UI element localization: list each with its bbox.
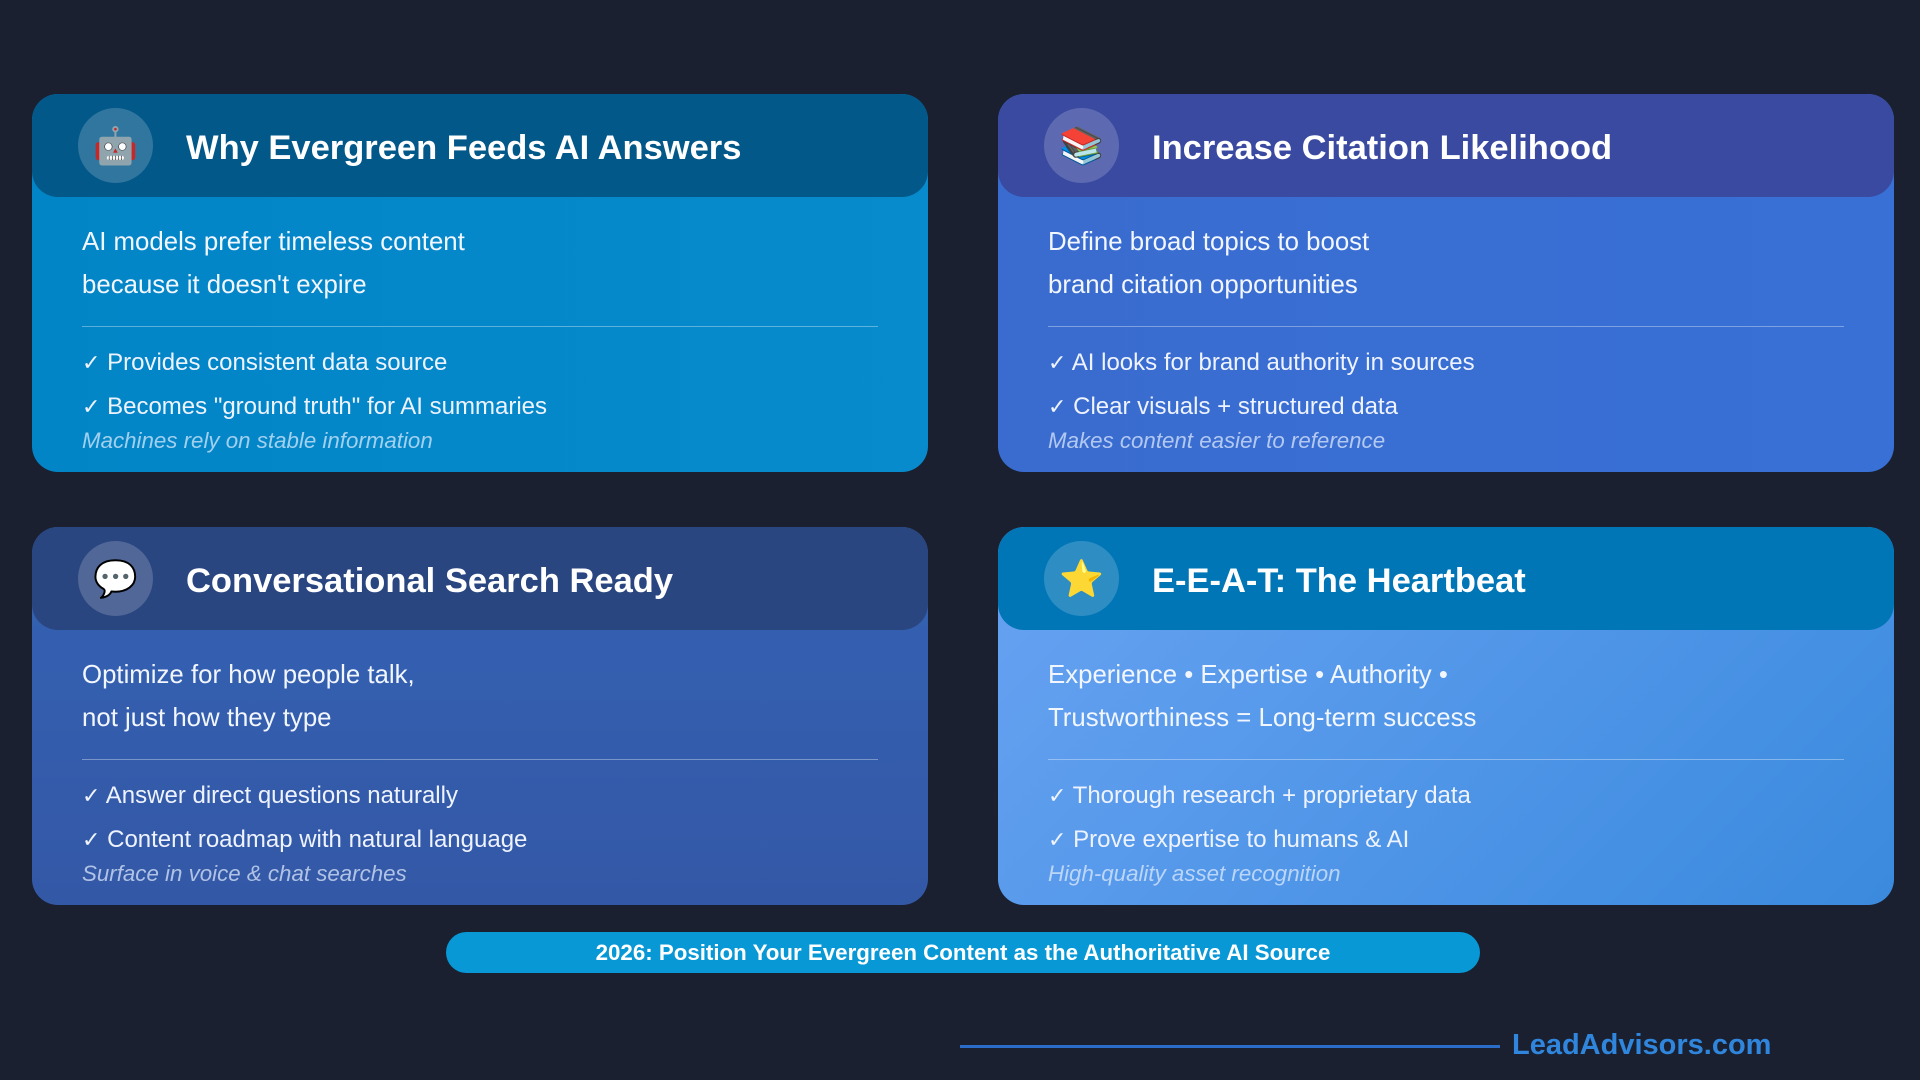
note: conversational: Surface in voice & chat searches — [82, 861, 407, 886]
text: eeat body: Experience • Expertise • Authority • — [1048, 661, 1448, 689]
header: eeat: ⭐ — [1059, 558, 1104, 598]
list: conversational checks — [82, 782, 527, 853]
header: conversational: 💬 — [93, 558, 138, 598]
note: eeat: High-quality asset recognition — [1048, 861, 1340, 886]
text: citation body: Define broad topics to boost — [1048, 228, 1369, 256]
header: conversational — [32, 527, 928, 630]
panel: conversational — [32, 527, 928, 905]
header: citation: Increase Citation Likelihood — [1152, 129, 1612, 167]
list: why evergreen checks: ✓ Becomes "ground truth" for AI summaries — [82, 393, 547, 420]
list: conversational checks: ✓ Content roadmap with natural language — [82, 826, 527, 853]
logo line — [960, 1045, 1500, 1048]
header: eeat — [998, 527, 1894, 630]
text: why evergreen body: AI models prefer timeless content — [82, 228, 465, 256]
text: eeat body — [1048, 661, 1476, 732]
list: citation checks: ✓ AI looks for brand authority in sources — [1048, 349, 1475, 376]
list: eeat checks: ✓ Prove expertise to humans & AI — [1048, 826, 1409, 853]
list: eeat checks — [1048, 782, 1471, 853]
text: citation body: brand citation opportunities — [1048, 271, 1358, 299]
logo: LeadAdvisors.com: LeadAdvisors.com — [1512, 1029, 1771, 1061]
header: conversational: Conversational Search Ready — [186, 562, 673, 600]
text: why evergreen body: because it doesn't expire — [82, 271, 367, 299]
header: citation — [998, 94, 1894, 197]
list: conversational checks: ✓ Answer direct questions naturally — [82, 782, 458, 809]
header: why evergreen: 🤖 — [93, 124, 138, 166]
text: citation body — [1048, 228, 1369, 299]
header: why evergreen — [32, 94, 928, 197]
text: conversational body — [82, 661, 415, 732]
header: why evergreen: Why Evergreen Feeds AI Answers — [186, 129, 741, 167]
text: conversational body: Optimize for how people talk, — [82, 661, 415, 689]
list: citation checks — [1048, 349, 1475, 420]
list: citation checks: ✓ Clear visuals + structured data — [1048, 393, 1398, 420]
panel: eeat — [998, 527, 1894, 905]
text: eeat body: Trustworthiness = Long-term success — [1048, 704, 1476, 732]
note: why evergreen: Machines rely on stable information — [82, 428, 433, 453]
banner: 2026 callout: 2026: Position Your Evergreen Content as the Authoritative AI Source — [596, 940, 1330, 965]
note: citation: Makes content easier to reference — [1048, 428, 1385, 453]
header: eeat: E-E-A-T: The Heartbeat — [1152, 562, 1526, 600]
text: why evergreen body — [82, 228, 465, 299]
list: why evergreen checks: ✓ Provides consistent data source — [82, 349, 447, 376]
panel: citation — [998, 94, 1894, 472]
header: citation: 📚 — [1059, 124, 1104, 166]
panel: why evergreen — [32, 94, 928, 472]
banner: 2026 callout — [446, 932, 1480, 973]
list: eeat checks: ✓ Thorough research + proprietary data — [1048, 782, 1471, 809]
list: why evergreen checks — [82, 349, 547, 420]
text: conversational body: not just how they type — [82, 704, 332, 732]
